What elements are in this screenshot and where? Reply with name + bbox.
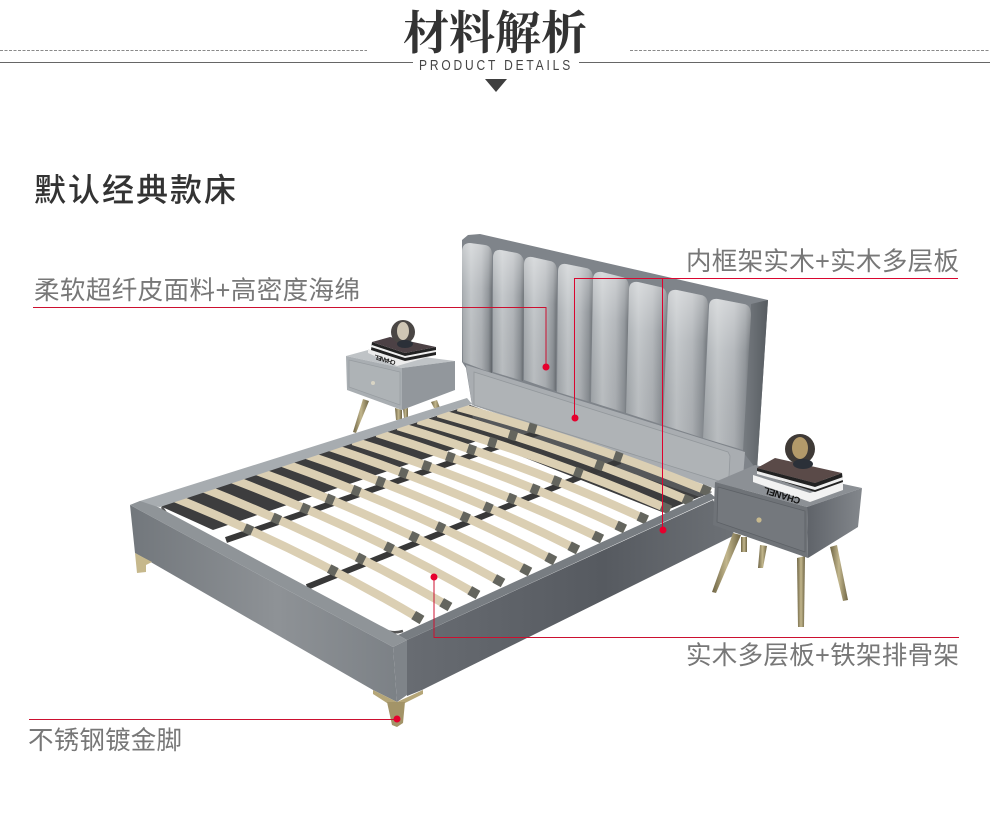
slat base dark band xyxy=(160,405,712,530)
subtitle: PRODUCT DETAILS xyxy=(419,57,570,73)
callout: inner frame solid wood xyxy=(572,248,959,534)
left rail top xyxy=(130,501,407,647)
cross beams xyxy=(226,432,620,587)
section header xyxy=(0,0,990,92)
callout: slat frame: 实木多层板+铁架排骨架 xyxy=(686,642,959,670)
headboard padded panels xyxy=(462,243,751,450)
callout: inner frame solid wood: 内框架实木+实木多层板 xyxy=(686,248,959,276)
headboard xyxy=(462,234,768,492)
books xyxy=(753,458,843,506)
ornament xyxy=(785,434,815,469)
right rail top xyxy=(398,493,716,640)
nightstand legs xyxy=(712,533,848,627)
callout: gold plated feet xyxy=(28,716,400,755)
heading: default classic bed: 默认经典款床 xyxy=(34,172,236,208)
nightstand legs xyxy=(353,399,440,433)
left nightstand xyxy=(346,320,455,433)
slats xyxy=(175,407,710,620)
inner rim line xyxy=(162,507,403,632)
front leg xyxy=(373,690,423,727)
corner strip xyxy=(393,640,407,702)
callout: slat frame xyxy=(430,574,959,670)
back rail xyxy=(130,398,472,507)
left rail face xyxy=(130,505,397,702)
right rail face xyxy=(407,500,735,696)
ornament xyxy=(391,320,415,348)
bed frame xyxy=(130,398,735,727)
books: CHANEL xyxy=(762,484,802,506)
callout: soft leather and foam: 柔软超纤皮面料+高密度海绵 xyxy=(34,277,360,305)
far leg xyxy=(135,553,152,573)
right nightstand xyxy=(712,434,862,627)
callout: gold plated feet: 不锈钢镀金脚 xyxy=(28,727,182,755)
callout: soft leather and foam xyxy=(33,277,550,370)
books: CHANEL xyxy=(373,353,397,366)
icon: down triangle xyxy=(485,79,507,92)
